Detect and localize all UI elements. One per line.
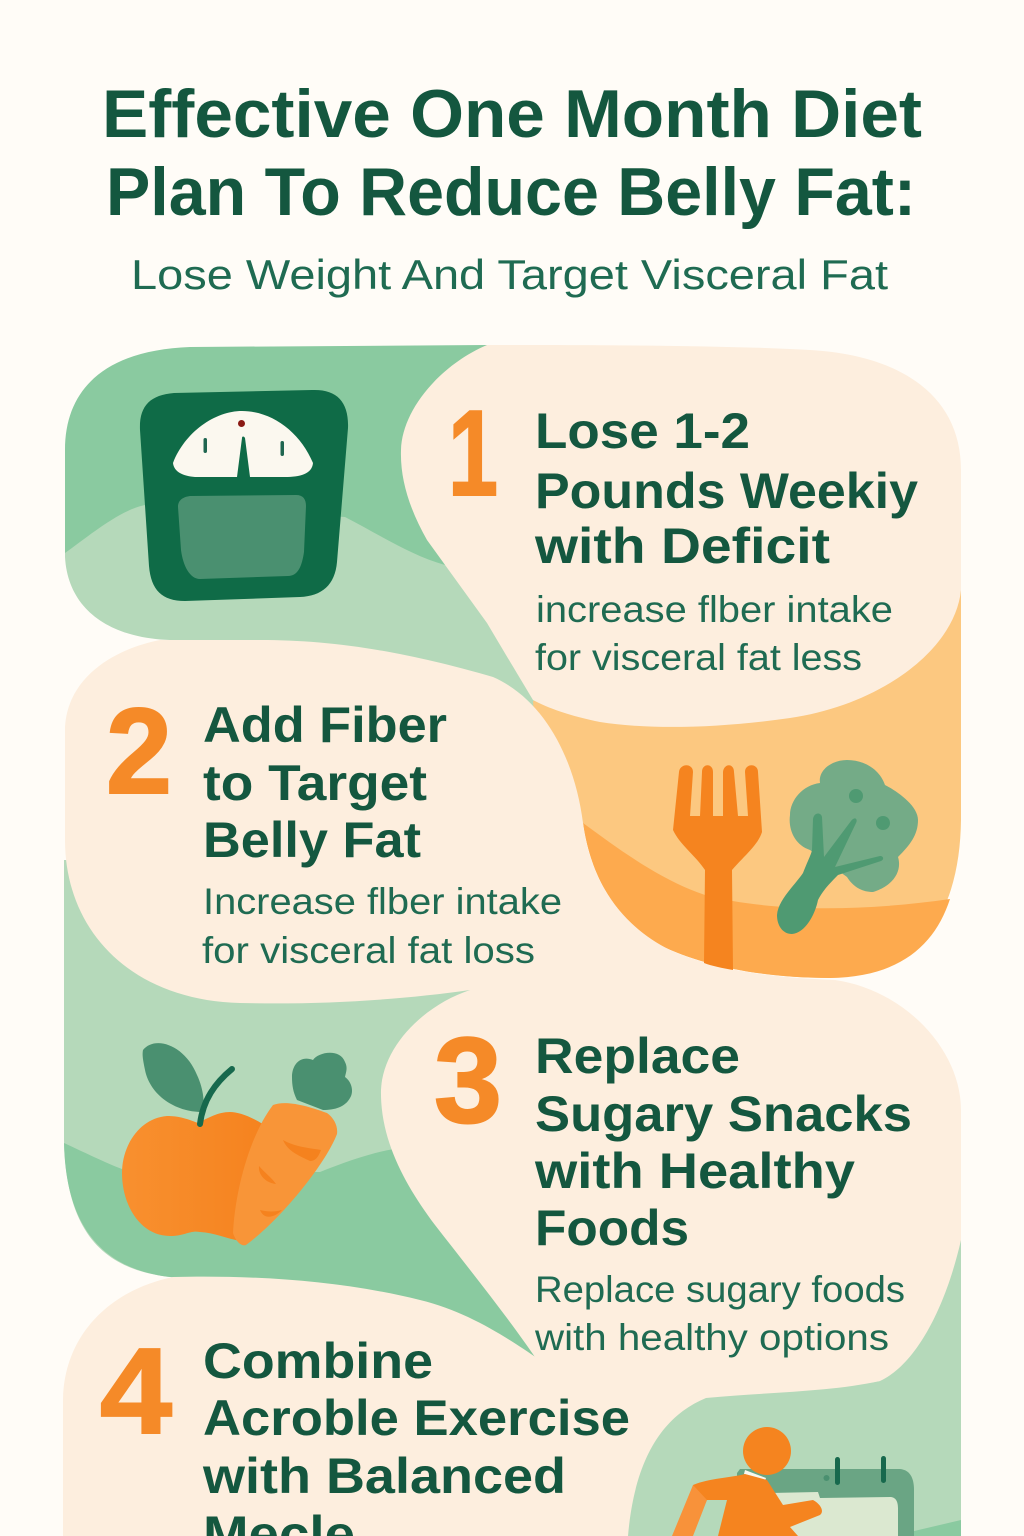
heading 1 — [534, 403, 918, 574]
heading 1: Lose 1-2 — [535, 403, 750, 459]
panel: scale background — [65, 345, 545, 712]
body 1: for visceral fat less — [535, 637, 862, 678]
panel: apple and carrot background — [64, 860, 540, 1365]
heading 2: Add Fiber — [203, 697, 447, 753]
card 3 bubble — [381, 980, 961, 1391]
card 2 text — [106, 683, 562, 971]
card 1 bubble — [401, 345, 961, 727]
icon: broccoli — [777, 760, 918, 934]
body 2 — [202, 881, 562, 971]
heading 2 — [203, 697, 447, 868]
title: Effective One Month Diet — [102, 76, 922, 152]
heading 2: Belly Fat — [203, 812, 421, 868]
heading 4: Acroble Exercise — [203, 1390, 630, 1446]
heading 3: with Healthy — [534, 1143, 855, 1199]
heading 3: Foods — [535, 1200, 689, 1256]
card 2 bubble — [65, 640, 835, 1040]
number 3: 3 — [434, 1012, 502, 1148]
panel: fork and broccoli background — [533, 570, 961, 978]
card 1 text — [448, 385, 918, 678]
number 2: 2 — [106, 683, 172, 819]
icon: calendar — [737, 1456, 914, 1536]
icon: fork — [673, 765, 762, 970]
title — [102, 76, 922, 230]
body 3: with healthy options — [534, 1317, 889, 1358]
icon: apple stem — [200, 1069, 232, 1124]
heading 3 — [534, 1028, 912, 1256]
heading 3: Replace — [535, 1028, 740, 1084]
card 4 text — [100, 1323, 630, 1536]
body 2: Increase flber intake — [203, 881, 562, 922]
body 2: for visceral fat loss — [202, 930, 535, 971]
heading 4 — [202, 1333, 630, 1536]
icon: apple leaf — [143, 1043, 204, 1112]
body 3 — [534, 1269, 905, 1358]
heading 1: Pounds Weekiy — [535, 463, 918, 519]
card 4 bubble — [63, 1277, 880, 1536]
body 3: Replace sugary foods — [535, 1269, 905, 1310]
heading 2: to Target — [203, 755, 427, 811]
icon: apple — [122, 1043, 272, 1241]
card 3 text — [434, 1012, 912, 1358]
body 1 — [535, 589, 893, 678]
icon: running person — [672, 1427, 822, 1536]
title: Plan To Reduce Belly Fat: — [106, 154, 916, 230]
heading 3: Sugary Snacks — [535, 1086, 912, 1142]
heading 4: with Balanced — [202, 1448, 566, 1504]
panel: exercise background — [600, 1200, 961, 1536]
icon: carrot — [233, 1053, 352, 1245]
heading 1: with Deficit — [534, 518, 830, 574]
icon: bathroom scale — [140, 390, 348, 601]
body 1: increase flber intake — [536, 589, 893, 630]
number 1: 1 — [448, 385, 498, 521]
subtitle: Lose Weight And Target Visceral Fat — [131, 251, 888, 298]
heading 4: Combine — [203, 1333, 433, 1389]
number 4: 4 — [100, 1323, 172, 1459]
